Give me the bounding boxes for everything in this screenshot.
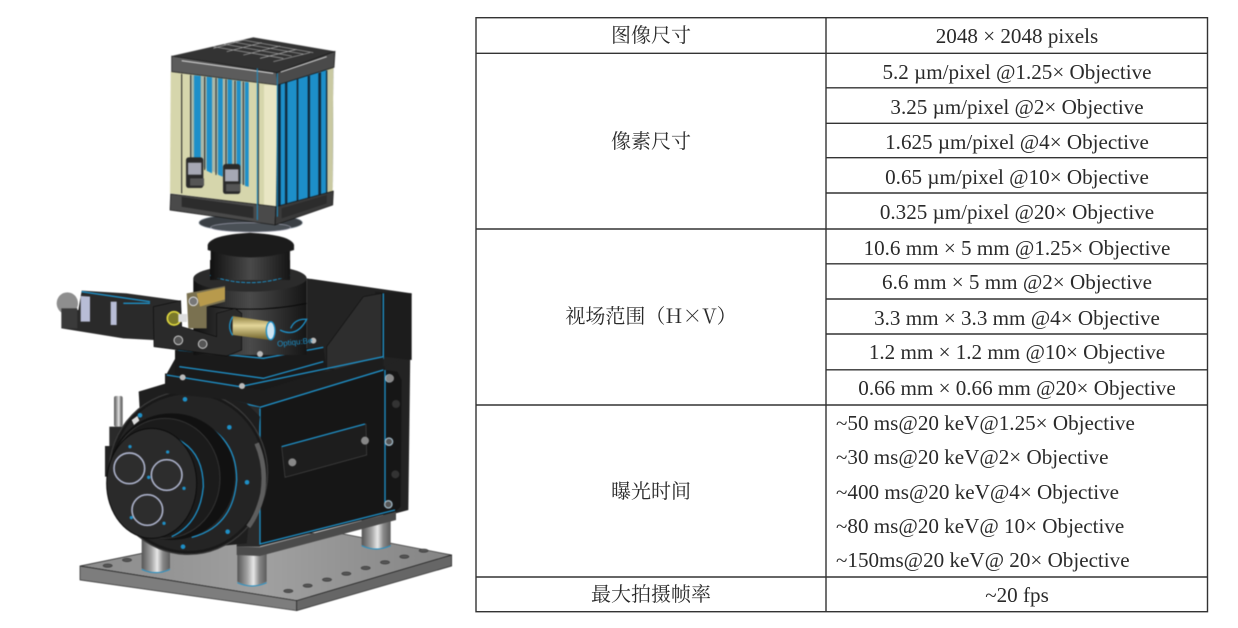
row values: field of view: 0.66 mm × 0.66 mm @20× Objective (858, 376, 1176, 400)
column neck and camera body (170, 37, 335, 278)
row values: pixel size: 0.65 µm/pixel @10× Objective (885, 165, 1149, 189)
row values: pixel size: 0.325 µm/pixel @20× Objective (880, 200, 1154, 224)
row values: field of view: 6.6 mm × 5 mm @2× Objective (882, 270, 1152, 294)
row values: field of view: 10.6 mm × 5 mm @1.25× Objective (864, 236, 1170, 260)
row heading: field of view: 视场范围（H×V） (565, 300, 737, 329)
side plate (282, 424, 367, 477)
gas nozzle (114, 396, 123, 427)
rear wall and central column (165, 260, 412, 403)
row values: pixel size: 1.625 µm/pixel @4× Objective (885, 130, 1149, 154)
row value: maximum frame rate: ~20 fps (985, 583, 1049, 607)
specification table (476, 18, 1208, 612)
fittings (186, 157, 240, 194)
row values: field of view (858, 236, 1176, 400)
main housing with objective turret (105, 320, 411, 556)
row values: exposure time: ~80 ms@20 keV@ 10× Objective (836, 514, 1124, 538)
row values: exposure time: ~150ms@20 keV@ 20× Objective (836, 548, 1130, 572)
row values: field of view: 3.3 mm × 3.3 mm @4× Objective (874, 306, 1160, 330)
row value: image size: 2048 × 2048 pixels (936, 24, 1098, 48)
row heading: image size: 图像尺寸 (611, 19, 691, 48)
logo text: Optiqu:Be (277, 336, 313, 349)
row values: pixel size: 3.25 µm/pixel @2× Objective (890, 95, 1144, 119)
turret rings (139, 383, 260, 550)
table grid (476, 18, 1208, 612)
row values: exposure time: ~50 ms@20 keV@1.25× Objective (836, 411, 1135, 435)
row heading: exposure time: 曝光时间 (611, 475, 691, 504)
camera top and bottom frames (172, 56, 277, 85)
brass bracket (187, 286, 225, 328)
row values: exposure time: ~400 ms@20 keV@4× Objective (836, 480, 1119, 504)
gold cylinder (233, 316, 270, 340)
camera right face (276, 68, 333, 207)
row values: pixel size (880, 60, 1154, 224)
row values: field of view: 1.2 mm × 1.2 mm @10× Objective (869, 340, 1165, 364)
illustration: detector assembly (57, 37, 452, 611)
motor and brass bracket (57, 286, 275, 356)
shoulder between column block and housing (139, 350, 385, 407)
objective apertures (114, 453, 182, 525)
row heading: maximum frame rate: 最大拍摄帧率 (591, 578, 711, 607)
row heading: pixel size: 像素尺寸 (611, 125, 691, 154)
row values: exposure time (836, 411, 1135, 572)
camera top vent (172, 37, 335, 73)
camera left face (170, 72, 277, 207)
base plate and support pillars (80, 517, 452, 611)
row values: pixel size: 5.2 µm/pixel @1.25× Objective (882, 60, 1152, 84)
row values: exposure time: ~30 ms@20 keV@2× Objective (836, 445, 1108, 469)
